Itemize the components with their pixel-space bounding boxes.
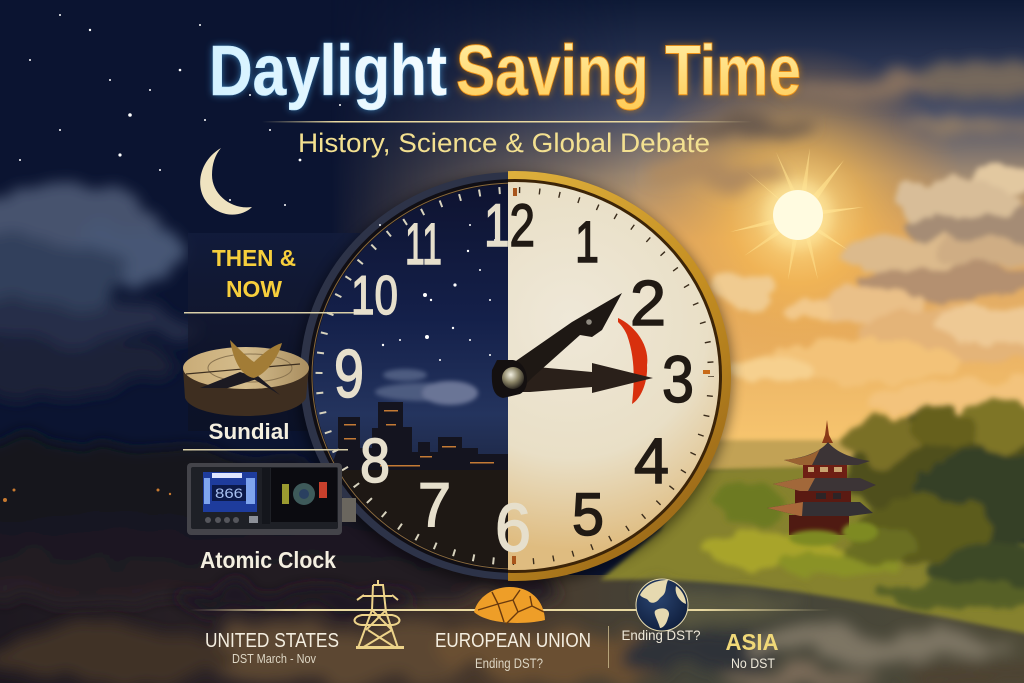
region: United States: UNITED STATES (205, 630, 339, 652)
clock numerals: 5 (572, 481, 604, 548)
icon: crescent moon (200, 148, 252, 215)
day cumulus clouds (715, 161, 1024, 420)
clock shadow (297, 174, 733, 586)
region: Asia: No DST (731, 655, 775, 671)
stars (19, 14, 341, 206)
clock numerals: 8 (360, 427, 390, 496)
title rule (262, 121, 752, 122)
clock face: night half (313, 184, 508, 568)
clock numerals: 3 (662, 342, 694, 416)
region: European Union: EUROPEAN UNION (435, 630, 591, 652)
panel heading: NOW (226, 276, 282, 302)
clock numerals: 9 (334, 336, 364, 412)
icon: sundial (183, 340, 309, 416)
icon: atomic clock (187, 463, 356, 535)
title: Saving Time (456, 32, 801, 111)
title: Saving Time (456, 32, 801, 111)
clock rim: day side (508, 171, 731, 581)
clock hand: minute (515, 363, 653, 393)
clock ticks (316, 187, 501, 564)
icon: pagoda (767, 420, 878, 546)
subtitle: History, Science & Global Debate (298, 128, 710, 158)
timeline rule (190, 609, 830, 611)
landscape: left ground (0, 441, 560, 600)
region: European Union: Ending DST? (475, 656, 543, 671)
clock numerals: 7 (418, 471, 451, 540)
clock numerals: 4 (634, 425, 669, 497)
clock (297, 171, 733, 586)
region: European Union (435, 630, 591, 671)
title: Daylight (209, 32, 447, 111)
day cirrus clouds (650, 64, 1024, 187)
icon: cracked golden dome (474, 587, 545, 624)
title (209, 32, 801, 111)
clock hand: hour (513, 293, 622, 388)
label: globe: Ending DST? (622, 627, 701, 643)
landscape: right fields and trees (600, 399, 1024, 640)
clock numerals: 1 (575, 210, 599, 275)
clock face: day half (508, 182, 719, 570)
region: Asia: ASIA (726, 629, 778, 655)
landscape: bottom base (0, 575, 1024, 683)
clock numerals: 11 (405, 212, 442, 277)
night clouds (0, 185, 200, 396)
panel: then and now (183, 245, 356, 573)
label: atomic clock: Atomic Clock (200, 547, 336, 573)
clock numerals: 10 (351, 264, 398, 326)
region: Asia (726, 629, 778, 671)
landscape: lower hills (0, 586, 1024, 683)
clock numerals: 6 (495, 490, 531, 566)
icon: globe (636, 579, 688, 631)
icon: sun (730, 148, 864, 280)
clock rim: night side (301, 172, 508, 580)
region: United States (205, 630, 339, 666)
timeline divider (608, 626, 609, 668)
clock hub (492, 360, 527, 398)
panel heading (212, 245, 296, 302)
panel heading: THEN & (212, 245, 296, 271)
red arc: one hour forward (618, 318, 647, 404)
panel background: then and now (188, 233, 360, 431)
clock numerals (334, 192, 694, 566)
clock numerals: 12 (484, 192, 535, 259)
region: United States: DST March - Nov (232, 651, 316, 666)
title: Daylight (209, 32, 447, 111)
icon: transmission tower (354, 580, 404, 649)
label: sundial: Sundial (208, 419, 290, 444)
city skyline (330, 402, 508, 575)
night cloud (375, 369, 478, 405)
icon: atomic clock: 866 (215, 485, 243, 501)
clock numerals: 2 (630, 267, 666, 339)
